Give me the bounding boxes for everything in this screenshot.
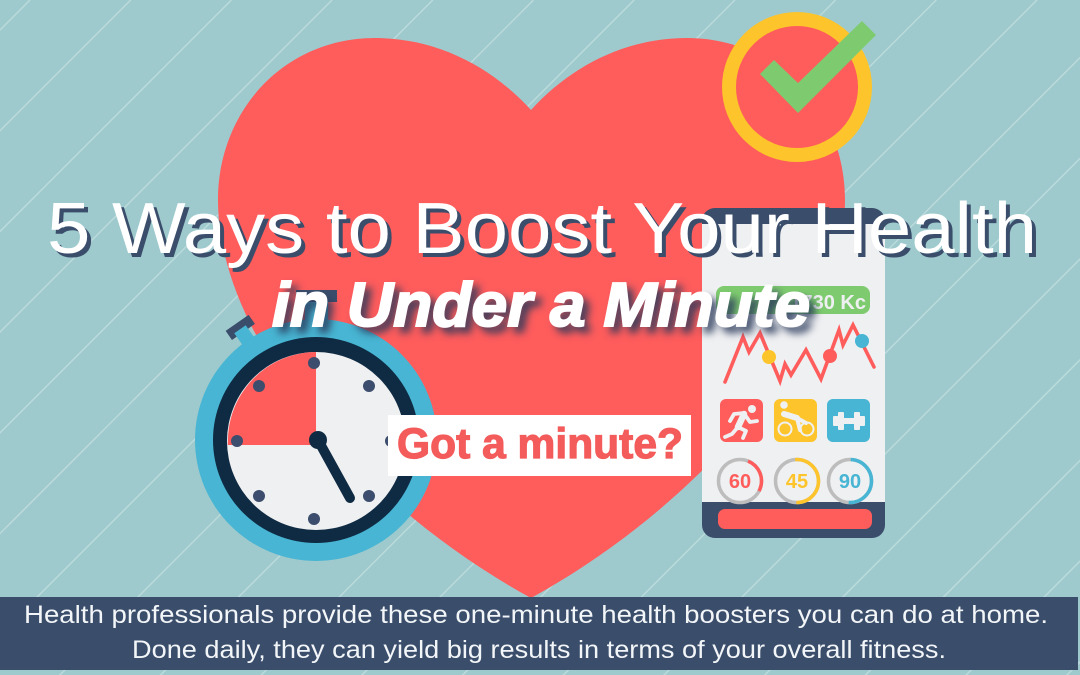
icon: stopwatch (195, 290, 437, 561)
title: 5 Ways to Boost Your Health (47, 189, 1037, 269)
line chart (725, 325, 874, 382)
progress ring: 45 (774, 458, 820, 504)
calorie bar: 1730 Kc (790, 292, 866, 314)
calorie bar (716, 286, 870, 314)
icon: check badge (729, 19, 876, 155)
progress ring: 90 (828, 459, 872, 503)
icon: cyclist (774, 399, 817, 442)
progress ring: 45: 45 (786, 471, 808, 493)
progress ring: 60 (712, 453, 768, 509)
icon: fitness phone (702, 208, 885, 538)
progress ring: 60: 60 (729, 471, 751, 493)
footer band (0, 597, 1078, 670)
icon: dumbbell (827, 399, 870, 442)
callout: got a minute: Got a minute? (397, 420, 683, 468)
subtitle: in Under a Minute (272, 271, 810, 340)
heart (218, 38, 845, 598)
icon: runner (720, 399, 763, 442)
footer text (24, 601, 1048, 664)
footer text: Done daily, they can yield big results in terms of your overall fitness. (132, 636, 946, 664)
progress ring: 90: 90 (839, 471, 861, 493)
footer text: Health professionals provide these one-minute health boosters you can do at home. (24, 601, 1048, 629)
